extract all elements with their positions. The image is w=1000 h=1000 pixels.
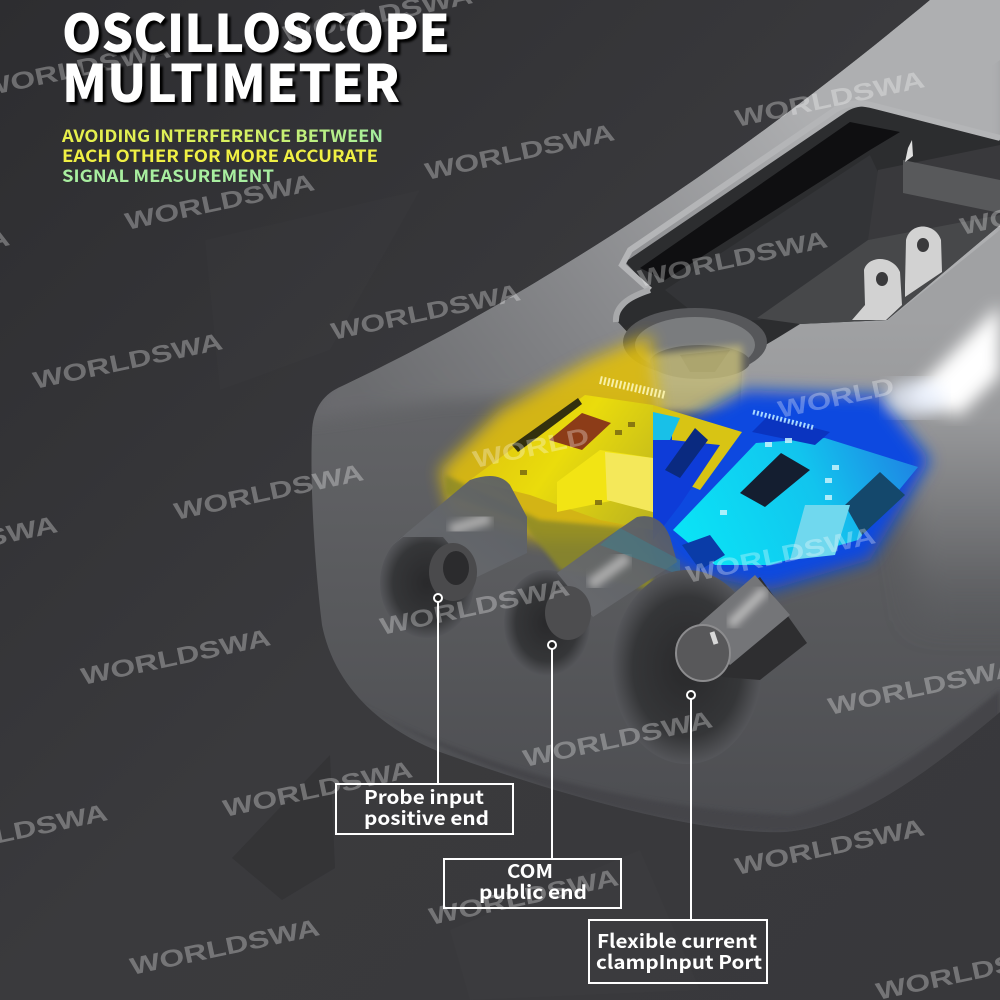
mouth middle [545,586,591,640]
tube left [390,476,527,577]
yellow PCB right section [653,405,742,490]
metal terminals [852,226,942,320]
callout: probe input: Probe input [364,783,484,810]
blue PCB [673,438,918,565]
tube right [680,577,807,680]
watermarks: WORLDSWA [423,119,617,186]
watermarks: WORLD [776,373,897,424]
back wall [665,155,905,322]
subtitle: EACH OTHER FOR MORE ACCURATE [62,142,378,167]
pale yellow fade [640,345,742,415]
port right [612,570,807,764]
right side fade [901,420,1000,588]
yellow-lit lower band [445,475,652,590]
watermarks: WORLDSWA [427,864,621,931]
white glare on blue edge [885,380,945,416]
subtitle [61,122,383,187]
callout: probe input [336,594,513,834]
subtitle: AVOIDING INTERFERENCE BETWEEN [61,122,383,147]
watermarks: WORLDSWA [172,459,366,526]
blue pads [720,438,839,515]
callout: flexible clamp [589,691,767,983]
battery compartment [616,103,1000,358]
circuit boards [440,335,930,590]
blue chip dark [665,428,708,478]
glass knob [623,308,767,379]
blue chip [740,453,810,507]
subtitle: SIGNAL MEASUREMENT [62,162,274,187]
black strip [640,122,900,280]
watermarks: WORLDSWA [684,522,878,589]
blue pale cube [790,505,850,560]
title: MULTIMETER [62,42,400,117]
watermarks: WORLDSWA [826,654,1000,721]
watermarks: WORLDSWA [31,328,225,395]
device [300,0,1000,840]
callout: probe input: positive end [364,804,489,831]
watermarks: WORLDSWA [329,279,523,346]
watermarks: WORLDSWA [221,756,415,823]
title [62,0,450,117]
right block [903,160,1000,213]
slab glare [905,305,1000,415]
device front body [300,0,1000,840]
yellow PCB bright cube [557,450,653,512]
blue small chip [682,535,725,570]
yellow PCB [470,395,653,530]
callout: flexible clamp: Flexible current [597,927,757,954]
yellow chip strip [512,398,582,452]
watermarks: WORLDSWA [79,624,273,691]
yellow pads [520,422,635,505]
yellow top pins [600,380,665,395]
watermarks: WORLD [471,423,592,474]
callout: flexible clamp: clampInput Port [596,948,762,975]
blue glow [653,390,930,590]
callout: COM: public end [479,878,587,905]
lower slab over compartment [741,232,1000,398]
ports [380,476,807,764]
callout: COM [444,641,621,908]
yellow glow [440,335,660,540]
mouth right [676,625,730,681]
watermarks: WORLDSWA [733,66,927,133]
floor [757,210,1000,324]
rim highlight [622,103,1000,290]
lower lip shading [442,693,1000,830]
watermarks: WORLDSWA [521,706,715,773]
watermarks: WORLDSWA [733,814,927,881]
top surface [300,0,1000,450]
inner right wall [868,145,1000,240]
watermarks: WORLDSWA [123,169,317,236]
blue PCB overlay [653,436,720,526]
tube middle [557,516,677,617]
watermarks: WORLDSWA [378,574,572,641]
mouth left [429,543,477,601]
port left [380,476,527,638]
callout: COM: COM [507,857,553,884]
port middle [504,516,680,676]
background faint shards [205,190,700,1000]
blue component right [845,472,905,535]
yellow chip [549,413,611,450]
watermarks: WORLDSWA [128,914,322,981]
compartment opening [618,106,1000,358]
blue top pins [752,416,830,445]
watermarks: WORLDSWA [636,226,830,293]
